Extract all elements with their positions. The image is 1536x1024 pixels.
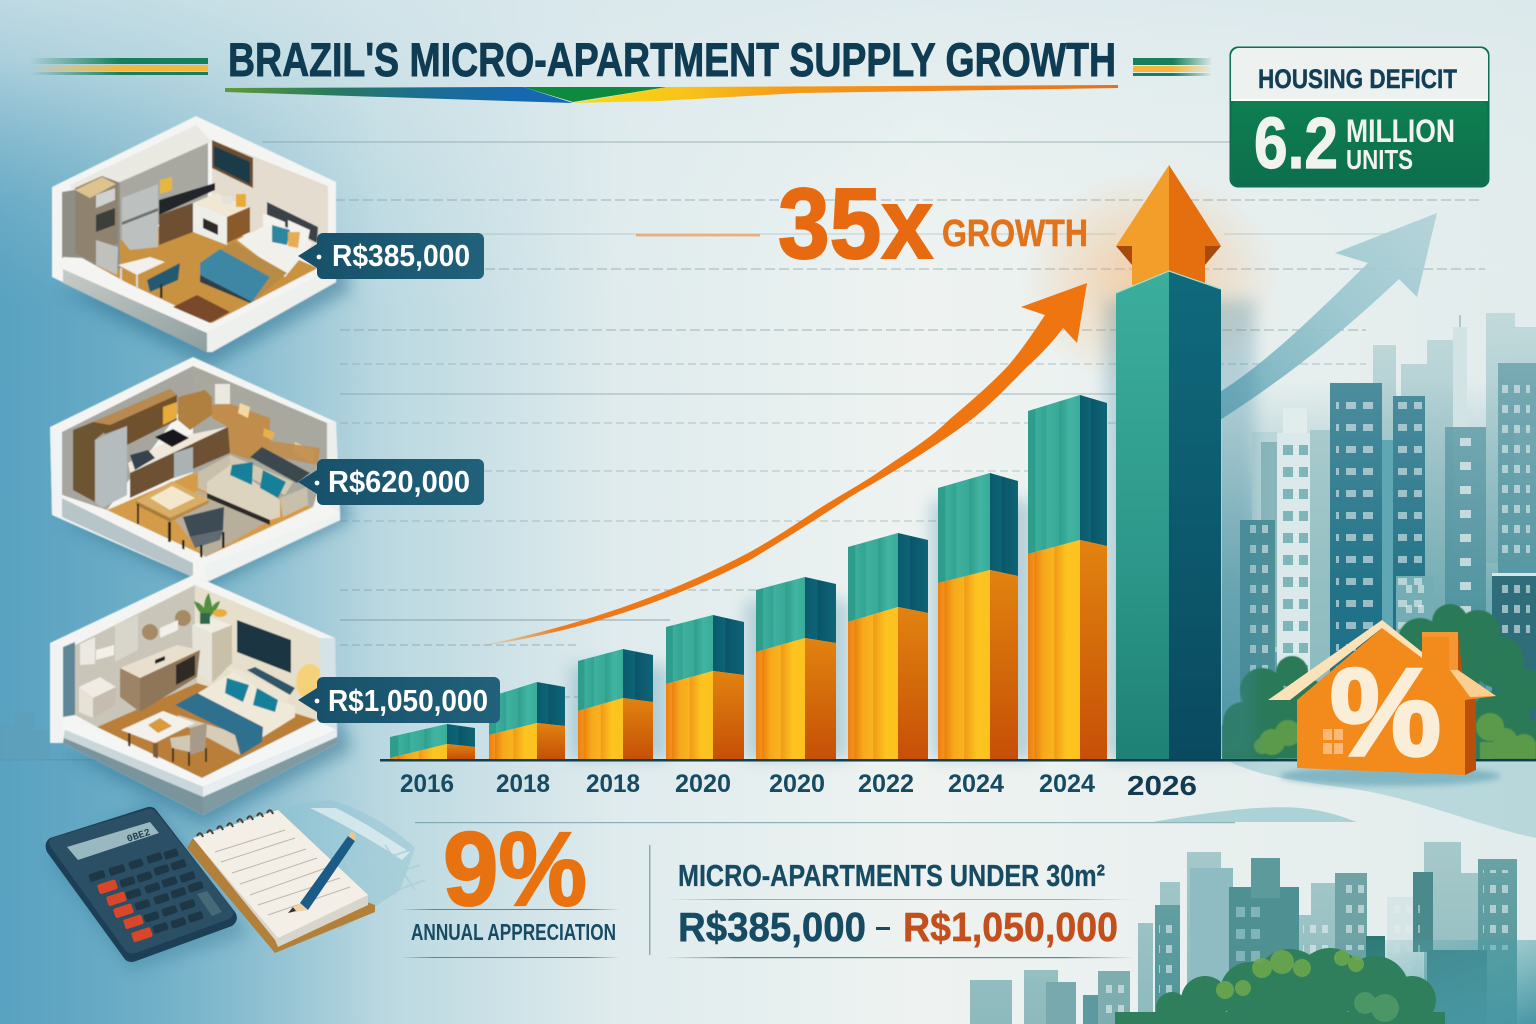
room 2: living studio xyxy=(50,357,352,590)
title banner xyxy=(34,42,1211,103)
bar 2016 xyxy=(390,724,475,759)
price tag 2: R$620,000 xyxy=(328,464,470,499)
bar 2024 second xyxy=(1028,395,1107,759)
card unit: UNITS xyxy=(1346,144,1413,175)
card unit: MILLION xyxy=(1346,113,1455,149)
price tag 1 xyxy=(298,233,484,279)
trees right xyxy=(1222,604,1536,759)
bottom skyline windows xyxy=(1100,870,1513,1020)
housing deficit card xyxy=(1230,47,1489,187)
range high: R$1,050,000 xyxy=(903,904,1118,950)
year labels: 2022 xyxy=(858,770,914,798)
year labels: 2024 xyxy=(948,770,1004,798)
card unit xyxy=(1346,113,1455,175)
callout label: GROWTH xyxy=(942,213,1088,255)
range dash xyxy=(876,927,890,930)
range heading: MICRO-APARTMENTS UNDER 30m² xyxy=(678,858,1105,893)
bar 2026 with arrow top xyxy=(1116,165,1221,759)
notepad and pencil icon xyxy=(187,810,425,953)
building windows xyxy=(1244,376,1530,758)
year labels: 2016 xyxy=(400,770,454,798)
house percent icon xyxy=(1268,620,1500,786)
price tag 2 xyxy=(298,459,484,505)
map pattern behind xyxy=(345,845,425,905)
bottom tree xyxy=(1115,948,1445,1024)
bar 2024 xyxy=(938,473,1018,759)
stat value: 9% xyxy=(443,811,587,928)
calculator icon xyxy=(46,800,250,970)
year labels: 2018 xyxy=(496,770,550,798)
appreciation stat xyxy=(400,811,620,958)
card heading: HOUSING DEFICIT xyxy=(1258,64,1457,94)
bar 2018 second xyxy=(578,649,653,759)
year labels: 2020 xyxy=(675,770,731,798)
bar 2020 xyxy=(666,615,744,759)
year labels: 2020 xyxy=(769,770,825,798)
bar 2018 xyxy=(489,682,565,759)
stat label: ANNUAL APPRECIATION xyxy=(411,919,616,945)
bar 2020 second xyxy=(756,577,836,759)
bar 2022 xyxy=(848,533,928,759)
price tag 3 xyxy=(298,677,500,723)
bar chart xyxy=(390,165,1280,759)
bar shadows xyxy=(570,300,1255,759)
title text: BRAZIL'S MICRO-APARTMENT SUPPLY GROWTH xyxy=(228,33,1116,86)
chart grid lines xyxy=(262,142,1485,697)
left faint skyline xyxy=(0,712,50,760)
skyline right xyxy=(1222,313,1536,760)
room 3: one-bed studio xyxy=(50,575,352,825)
house percent icon: % xyxy=(1330,644,1441,782)
price tag 3: R$1,050,000 xyxy=(328,683,488,718)
price tag 1: R$385,000 xyxy=(332,238,470,273)
calculator icon: 0BE2 xyxy=(126,828,152,846)
range low: R$385,000 xyxy=(678,904,866,950)
pencil xyxy=(288,831,356,913)
year labels: 2026 xyxy=(1127,770,1197,801)
micro-apartments price range xyxy=(415,822,1235,958)
growth trend arrow xyxy=(468,283,1087,648)
year labels: 2024 xyxy=(1039,770,1095,798)
bottom skyline xyxy=(970,842,1536,1024)
title decorative strip right xyxy=(1133,58,1211,76)
background arrow xyxy=(1220,213,1437,420)
callout multiplier: 35x xyxy=(778,168,933,280)
title underline xyxy=(225,85,1118,103)
card value: 6.2 xyxy=(1254,104,1338,184)
year labels: 2018 xyxy=(586,770,640,798)
title decorative strip left xyxy=(30,58,208,75)
growth callout xyxy=(636,168,1088,280)
year labels xyxy=(400,770,1197,801)
room 1: studio xyxy=(52,116,352,368)
axis line xyxy=(380,759,1536,762)
